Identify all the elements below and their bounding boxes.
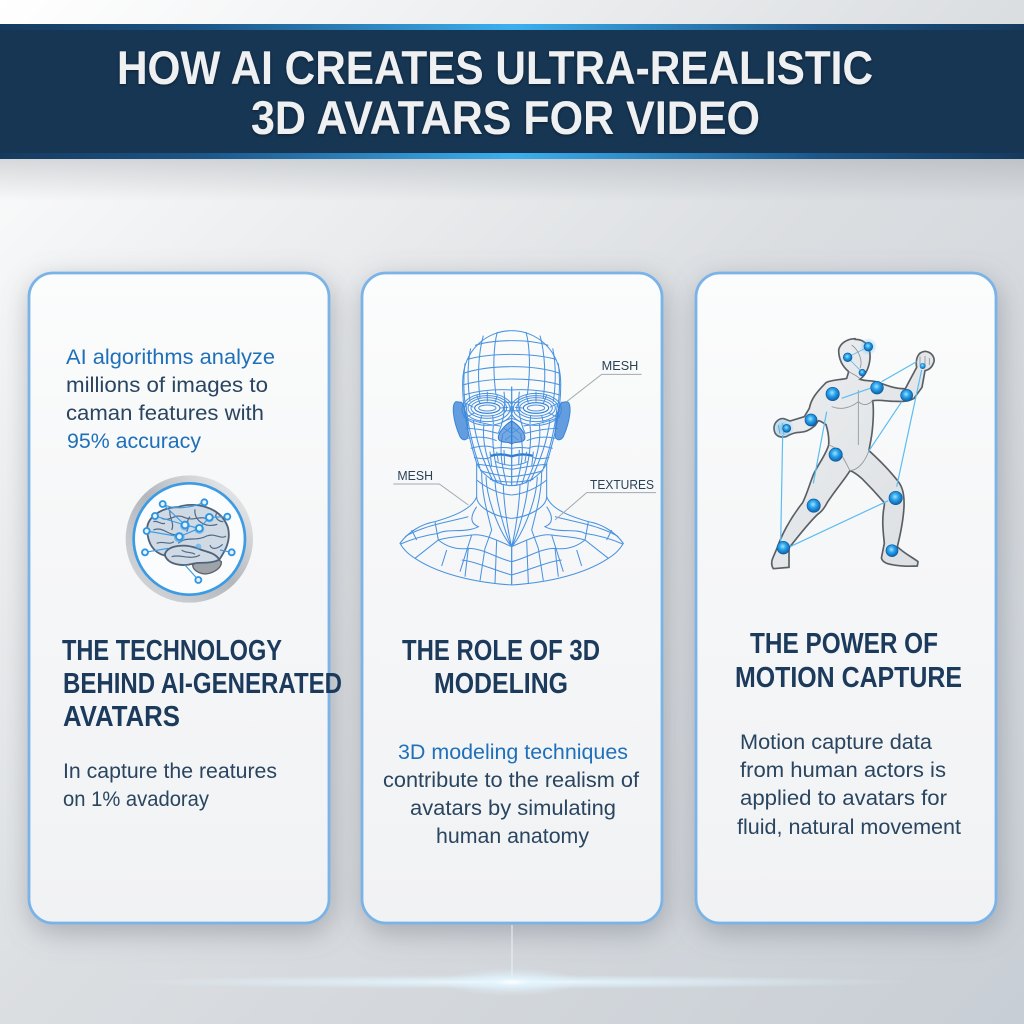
intro text: millions of images to [66, 374, 268, 397]
heading: technology: THE TECHNOLOGY [62, 635, 282, 667]
heading: 3D modeling [402, 635, 600, 700]
title text: HOW AI CREATES ULTRA-REALISTIC [117, 41, 873, 94]
heading: 3D modeling: THE ROLE OF 3D [402, 635, 600, 667]
title text: 3D AVATARS FOR VIDEO [251, 91, 760, 144]
body text: technology [63, 760, 277, 811]
body text: motion capture: from human actors is [740, 759, 946, 782]
figure body [772, 339, 934, 569]
callout: mesh right [567, 358, 642, 402]
body text: 3D modeling: avatars by simulating [410, 797, 616, 820]
capture lines [781, 347, 922, 547]
body text: 3D modeling: 3D modeling techniques [398, 741, 628, 764]
panel: 3D modeling [362, 273, 662, 923]
intro text: caman features with [66, 402, 264, 425]
body text: motion capture [737, 731, 961, 839]
heading: 3D modeling: MODELING [434, 668, 568, 700]
icon: brain in circular badge [129, 479, 249, 599]
heading: motion capture: THE POWER OF [750, 628, 938, 660]
bottom light flare [112, 925, 912, 996]
heading: technology: BEHIND AI-GENERATED [63, 668, 342, 700]
joint markers [773, 338, 926, 557]
callout: mesh left: MESH [397, 468, 433, 483]
title banner [0, 24, 1024, 201]
heading: motion capture [735, 628, 962, 694]
intro text: AI algorithms analyze [66, 346, 275, 369]
wireframe head illustration [393, 331, 656, 585]
motion capture figure [772, 338, 934, 569]
callout: mesh right: MESH [602, 358, 638, 373]
body text: technology: In capture the reatures [63, 760, 277, 783]
body details [778, 345, 929, 471]
body text: 3D modeling [383, 741, 639, 848]
heading: technology: AVATARS [63, 701, 180, 733]
body text: motion capture: fluid, natural movement [737, 816, 961, 839]
body text: motion capture: Motion capture data [740, 731, 932, 754]
callout: mesh left [393, 468, 468, 505]
body text: technology: on 1% avadoray [63, 788, 209, 811]
body text: motion capture: applied to avatars for [740, 787, 947, 810]
body text: 3D modeling: human anatomy [436, 825, 590, 848]
intro text: 95% accuracy [67, 430, 201, 453]
title text [117, 41, 873, 144]
heading: technology [62, 635, 342, 733]
body text: 3D modeling: contribute to the realism of [383, 769, 639, 792]
callout: textures: TEXTURES [590, 477, 654, 492]
heading: motion capture: MOTION CAPTURE [735, 662, 962, 694]
intro text [66, 346, 275, 453]
callout: textures [555, 477, 656, 520]
panel: motion capture [696, 273, 996, 923]
panel: technology behind avatars [29, 273, 342, 923]
